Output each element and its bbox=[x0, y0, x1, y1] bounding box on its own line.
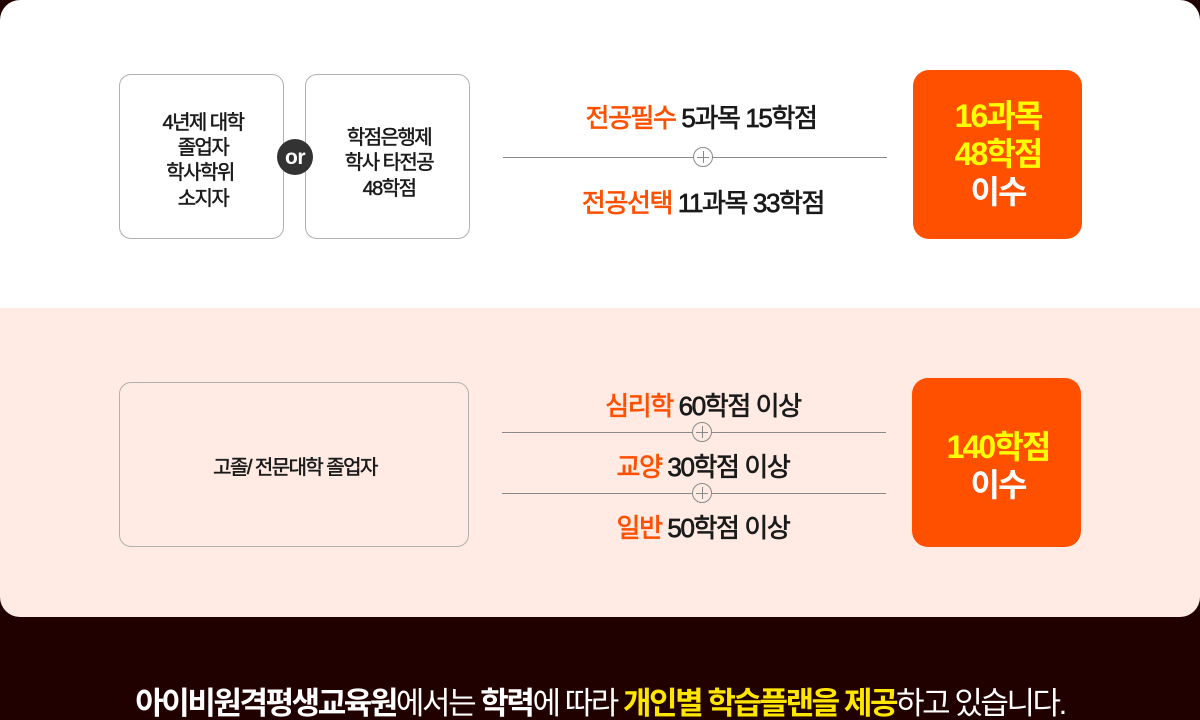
panel: high school or college path bbox=[0, 308, 1200, 617]
box: four-year degree holder bbox=[119, 74, 284, 239]
text: four-year degree holder: 4년제 대학 bbox=[163, 112, 243, 134]
text: credit bank: 48학점 bbox=[363, 178, 415, 200]
text: credit bank: 학사 타전공 bbox=[345, 152, 433, 174]
text: liberal arts credits: 교양 30학점 이상 bbox=[617, 452, 789, 482]
divider one bbox=[502, 432, 886, 433]
panel: major-related path bbox=[0, 0, 1200, 320]
badge: or bbox=[277, 139, 313, 175]
badge: or: or bbox=[285, 146, 305, 169]
text: major elective: 전공선택 11과목 33학점 bbox=[582, 188, 824, 218]
text: four-year degree holder: 소지자 bbox=[178, 188, 228, 210]
text: result 16 courses bbox=[955, 98, 1042, 210]
icon: plus bbox=[693, 147, 713, 167]
text: four-year degree holder: 학사학위 bbox=[166, 162, 234, 184]
icon: plus one bbox=[692, 422, 712, 442]
footer statement: 아이비원격평생교육원에서는 학력에 따라 개인별 학습플랜을 제공하고 있습니다. bbox=[135, 686, 1065, 720]
box: credit bank bbox=[305, 74, 470, 239]
text: result 16 courses: 48학점 bbox=[955, 136, 1041, 172]
text: result 16 courses: 16과목 bbox=[955, 98, 1041, 134]
box: high school or college graduate bbox=[119, 382, 469, 547]
text: high school or college graduate: 고졸/ 전문대학 졸업자 bbox=[213, 457, 377, 479]
result: 140 credits bbox=[912, 378, 1081, 547]
text: result 140 credits: 이수 bbox=[970, 467, 1026, 503]
text: result 140 credits bbox=[947, 429, 1049, 503]
text: general credits: 일반 50학점 이상 bbox=[617, 513, 789, 543]
text: four-year degree holder bbox=[162, 112, 245, 210]
text: major required: 전공필수 5과목 15학점 bbox=[585, 103, 817, 133]
text: credit bank: 학점은행제 bbox=[347, 127, 431, 149]
divider two bbox=[502, 493, 886, 494]
result: 16 courses 48 credits bbox=[913, 70, 1082, 239]
text: result 140 credits: 140학점 bbox=[947, 429, 1049, 465]
divider with plus bbox=[503, 157, 887, 158]
text: four-year degree holder: 졸업자 bbox=[178, 137, 228, 159]
text: psychology credits: 심리학 60학점 이상 bbox=[605, 391, 801, 421]
text: result 16 courses: 이수 bbox=[970, 174, 1026, 210]
icon: plus two bbox=[692, 483, 712, 503]
text: credit bank bbox=[345, 127, 434, 200]
